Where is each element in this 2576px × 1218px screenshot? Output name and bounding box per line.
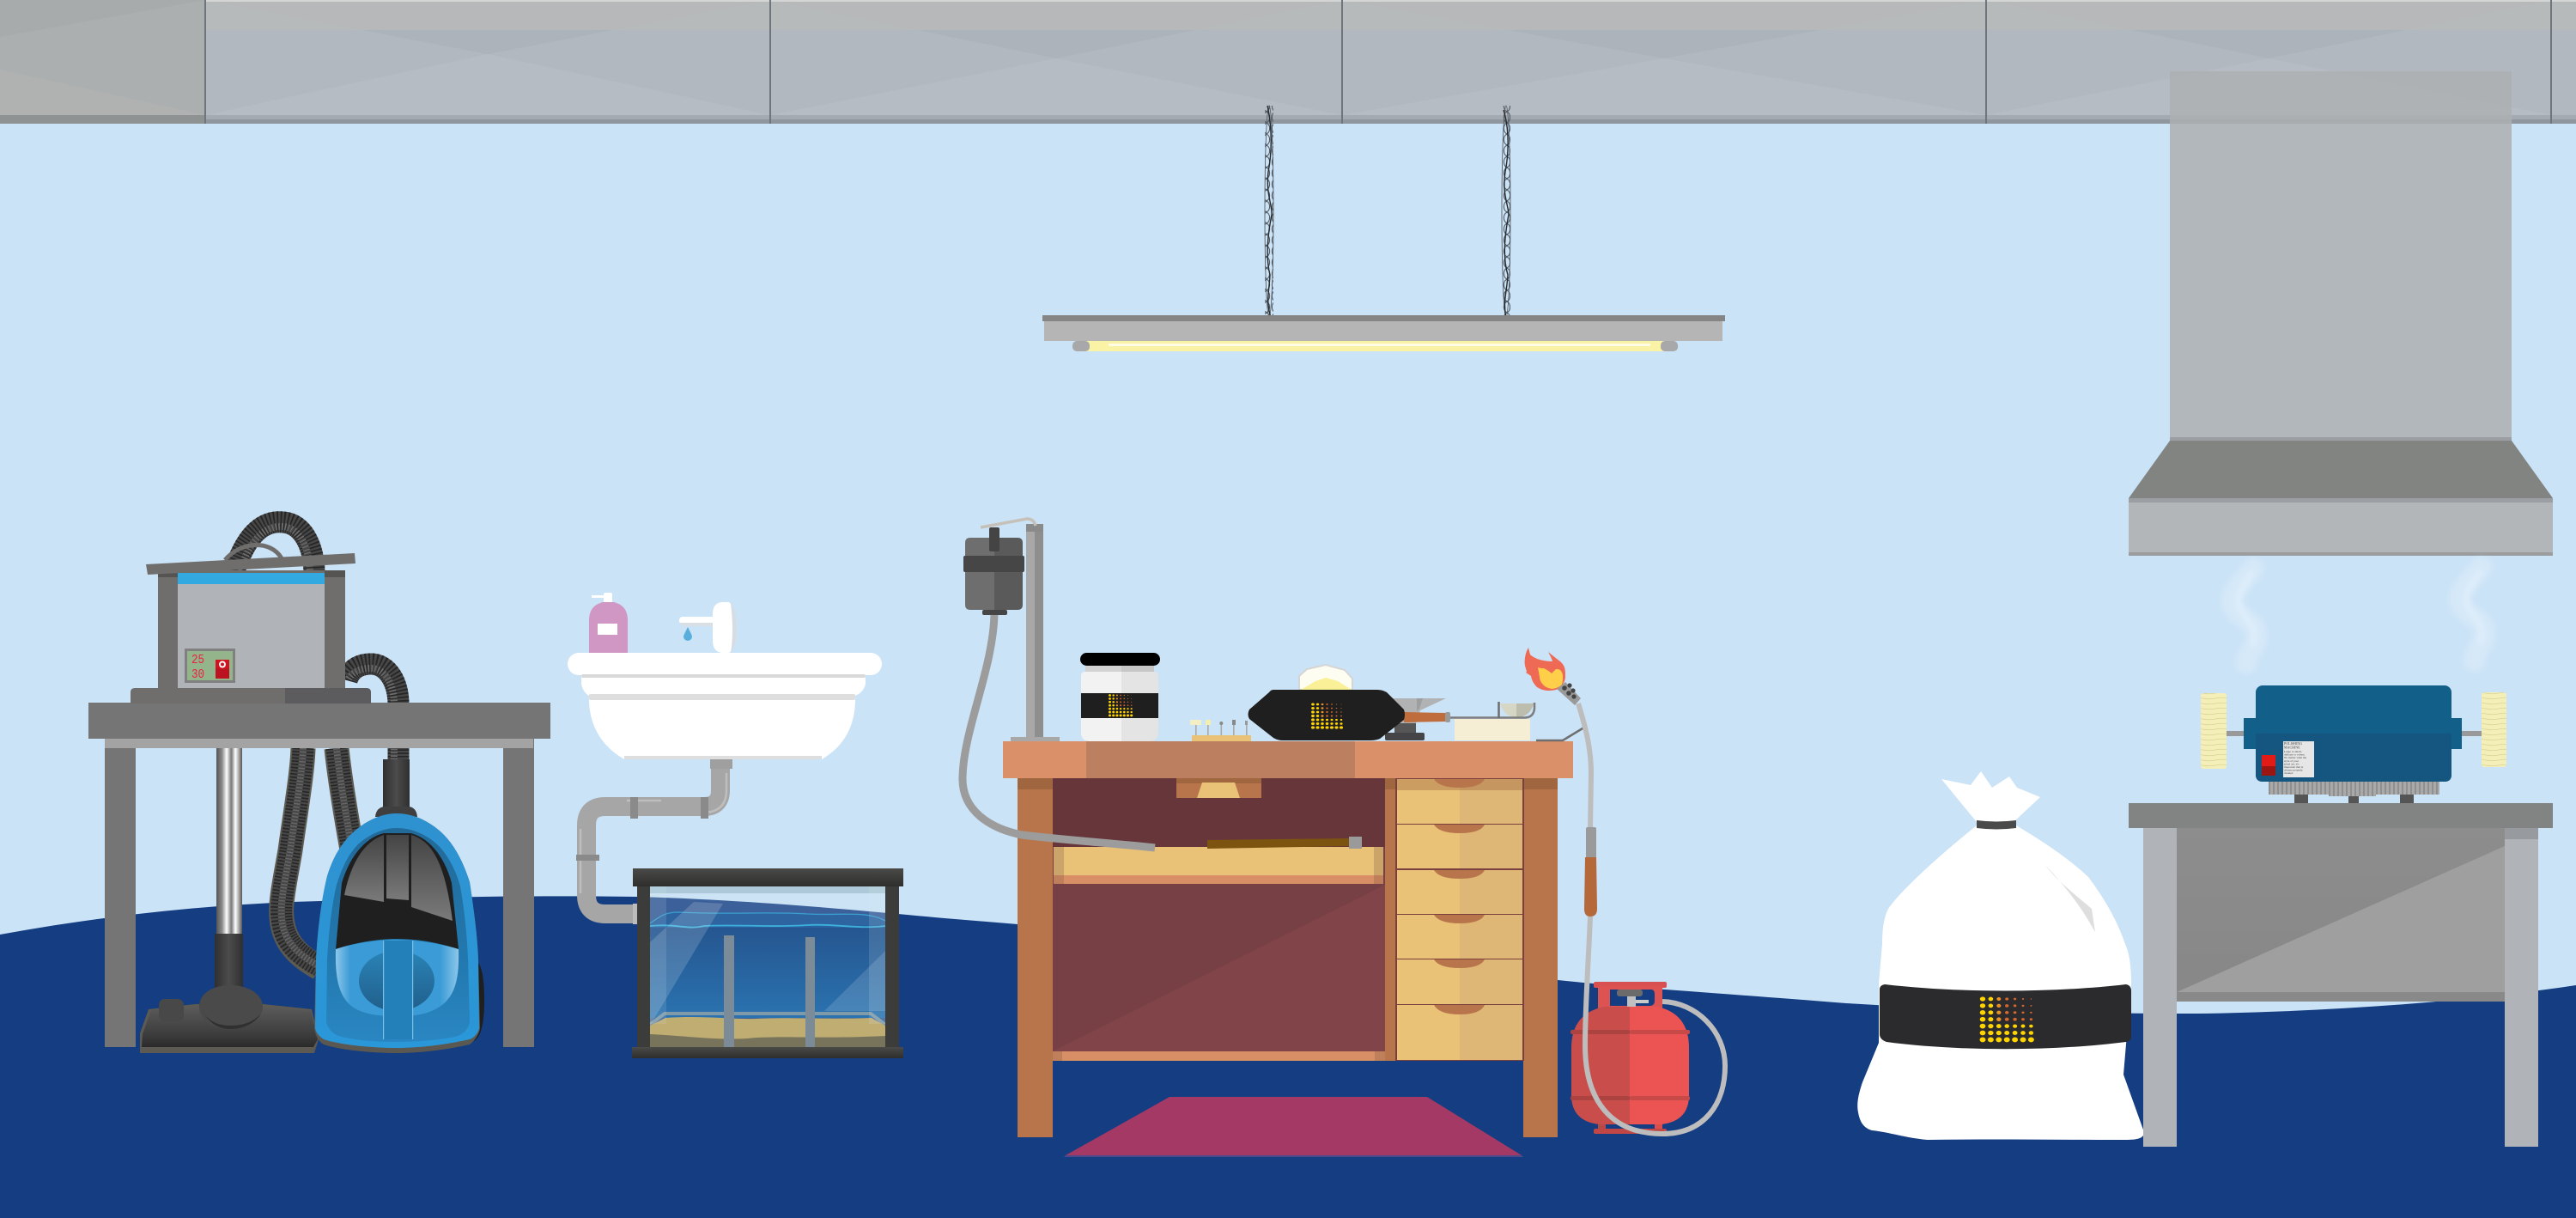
lid handle loop <box>225 545 282 560</box>
time readout: 30 <box>191 667 204 682</box>
vacuum gauge <box>336 940 459 1016</box>
flame <box>1525 648 1565 691</box>
vacuum floor nozzle <box>140 985 319 1053</box>
flexible shaft <box>963 615 1155 848</box>
hose arc right <box>347 664 398 764</box>
drawers <box>1395 778 1524 1061</box>
small top drawer <box>1176 778 1261 798</box>
machine label: always properly <box>2284 769 2303 772</box>
machine label: jewel set, it's <box>2283 762 2300 766</box>
machine label: Large or small, <box>2284 750 2302 754</box>
soap dispenser <box>589 593 628 653</box>
filter rods <box>724 935 734 1047</box>
ceiling <box>0 0 2576 124</box>
torch stand <box>1536 726 1587 740</box>
anvil <box>1385 698 1446 740</box>
motor housing <box>2256 685 2451 782</box>
glass back <box>650 886 885 1047</box>
bench legs <box>1018 778 1558 1137</box>
bench divider <box>1385 778 1396 1061</box>
table legs <box>2143 828 2538 1147</box>
bag neck <box>1941 771 2040 822</box>
motor <box>963 527 1024 615</box>
hose under table right <box>337 748 354 859</box>
power button <box>2262 755 2275 776</box>
chain right <box>1502 106 1510 319</box>
table top <box>88 703 550 739</box>
glass reflections <box>650 902 723 1026</box>
polishing machine <box>2201 685 2506 803</box>
machine label: No matter what the <box>2284 756 2307 759</box>
table strip <box>105 737 533 748</box>
torch head <box>1557 682 1581 705</box>
pull-out shelf <box>1054 847 1383 884</box>
gas cylinder <box>1571 982 1690 1134</box>
hanging lamp <box>1042 106 1725 351</box>
handpiece <box>1207 837 1362 849</box>
water <box>650 925 885 1018</box>
saw frame and handle <box>1404 702 1534 740</box>
bench back panel <box>1053 778 1385 1051</box>
machine label: POLISHING <box>2284 741 2302 746</box>
rubbish bag <box>1857 771 2144 1140</box>
tank bottom frame <box>632 1047 903 1058</box>
blow torch with hose <box>1525 648 1725 1134</box>
water drop <box>683 627 692 641</box>
machine label: important that is <box>2284 765 2304 769</box>
cleaner lid <box>146 553 355 575</box>
drawer 3 <box>1397 870 1522 914</box>
vacuum wand <box>215 748 243 990</box>
extractor hood <box>2129 71 2553 556</box>
ceiling panels <box>0 0 2576 115</box>
aquarium filter tank <box>632 868 903 1058</box>
motor side caps <box>2244 718 2462 749</box>
cleaner body <box>158 570 345 688</box>
hose arc upper <box>234 522 314 574</box>
machine label: delicate or robust. <box>2284 753 2306 757</box>
hood skirt <box>2129 441 2553 498</box>
faucet <box>679 602 737 653</box>
table back panel <box>2177 828 2505 1002</box>
smoke left <box>2232 569 2257 663</box>
bench top <box>1003 741 1573 778</box>
machine label: style of your <box>2284 759 2300 763</box>
bag logo dots <box>1980 996 2034 1042</box>
small bowl <box>1500 703 1534 717</box>
back rim <box>650 1014 885 1025</box>
table legs <box>105 739 534 1047</box>
machine label <box>2283 741 2314 777</box>
machine label: cleaned <box>2284 771 2293 775</box>
vacuum hose <box>234 522 398 968</box>
power switch <box>216 660 229 679</box>
axles <box>2227 731 2482 736</box>
vacuum rear wheel <box>474 959 484 1041</box>
bag tie <box>1977 820 2016 830</box>
vacuum window <box>336 833 459 949</box>
drawer 6 <box>1397 1005 1522 1060</box>
gas hose <box>1578 703 1725 1134</box>
cylinder feet <box>1598 1124 1606 1130</box>
vacuum centre strap <box>384 941 412 1039</box>
cylinder carry handle <box>1598 986 1662 1012</box>
smoke right <box>2459 567 2484 661</box>
vacuum gauge dial <box>359 951 434 1011</box>
temperature readout: 25 <box>191 653 204 667</box>
drawer 1 <box>1397 779 1522 824</box>
bottom rail <box>1053 1051 1385 1061</box>
tank top frame <box>633 868 903 886</box>
vacuum neck <box>375 759 417 817</box>
vacuum cleaner body <box>314 759 484 1053</box>
bag label band <box>1880 984 2131 1049</box>
drain pipe <box>576 759 732 924</box>
white jar <box>1080 653 1160 741</box>
ultrasonic cleaner <box>131 545 371 703</box>
bag body <box>1857 825 2144 1140</box>
machine base <box>2269 782 2439 796</box>
drawer 2 <box>1397 825 1522 868</box>
stand <box>1011 524 1060 741</box>
chain left <box>1265 106 1273 318</box>
wash basin <box>568 653 882 759</box>
vacuum shell <box>314 813 480 1053</box>
cylinder body <box>1571 1007 1630 1124</box>
machine feet <box>2294 795 2414 803</box>
black tool pouch <box>1249 690 1405 740</box>
tank posts <box>637 885 650 1048</box>
steel table left <box>88 703 550 1047</box>
hood front <box>2129 498 2553 556</box>
red rug <box>1064 1097 1523 1157</box>
hanger wire <box>981 519 1036 527</box>
workbench <box>1003 741 1573 1137</box>
bag fold <box>2045 865 2095 932</box>
steel table right <box>2129 803 2553 1147</box>
vacuum inner shell <box>326 828 470 1042</box>
hood chimney <box>2170 71 2512 441</box>
flex shaft machine <box>963 519 1362 849</box>
machine label: MACHINE <box>2284 746 2300 749</box>
lamp tube <box>1072 341 1678 351</box>
bur stand <box>1190 720 1251 741</box>
pouch logo dots <box>1311 703 1343 729</box>
floor <box>0 896 2576 1218</box>
sand <box>650 1017 885 1047</box>
lamp housing <box>1044 321 1722 341</box>
cleaner base <box>131 688 371 703</box>
jar logo dots <box>1109 694 1133 716</box>
control panel <box>185 649 235 683</box>
drawer 5 <box>1397 959 1522 1004</box>
table top <box>2129 803 2553 828</box>
hose under table left <box>282 748 319 968</box>
torch handle <box>1584 827 1597 917</box>
wax cloth <box>1299 665 1352 690</box>
polishing wheels <box>2201 692 2506 769</box>
drawer 4 <box>1397 915 1522 959</box>
